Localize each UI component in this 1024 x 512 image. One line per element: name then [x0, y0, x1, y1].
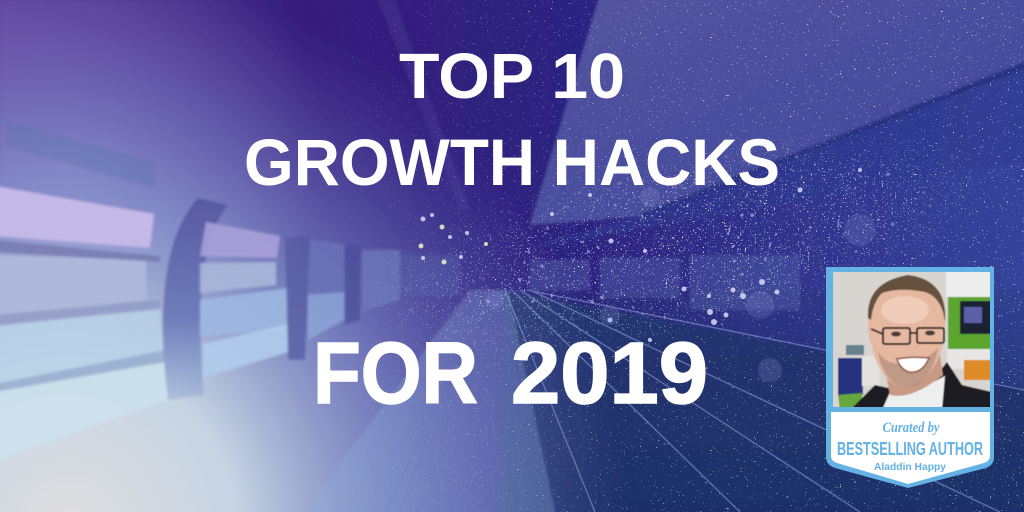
rail lines	[505, 290, 1024, 512]
collar	[882, 376, 945, 410]
title: For 2019: FOR	[313, 325, 478, 422]
bokeh stars	[418, 168, 862, 342]
title: For 2019: 2019	[511, 325, 708, 422]
hair	[868, 275, 945, 322]
platform floor	[300, 290, 556, 512]
far tunnel windows	[400, 255, 800, 310]
ceiling plane upper right	[530, 0, 1024, 225]
author name: Aladdin Happy	[874, 461, 946, 473]
ceiling panel sign	[5, 120, 155, 188]
forehead highlight	[881, 296, 929, 324]
title: For 2019	[313, 325, 708, 422]
badge white panel	[831, 412, 990, 484]
author photo	[830, 270, 992, 410]
eyes	[891, 330, 935, 336]
smile	[897, 357, 929, 372]
pillar	[163, 198, 228, 400]
head	[868, 283, 945, 387]
floor dark right side	[500, 290, 1024, 512]
pale glow lower left	[0, 0, 700, 512]
title: Top 10: TOP 10	[399, 40, 625, 112]
curated by: Curated by	[882, 420, 940, 436]
badge: curated by bestselling author	[826, 267, 994, 488]
glasses	[871, 328, 944, 344]
jacket	[850, 362, 992, 410]
stubble	[878, 348, 938, 387]
windows	[0, 186, 154, 248]
title: Growth Hacks: GROWTH HACKS	[244, 125, 780, 199]
badge frame	[826, 267, 994, 488]
neck	[885, 355, 943, 396]
fine star dust	[358, 131, 1003, 358]
soft haze	[486, 187, 876, 382]
